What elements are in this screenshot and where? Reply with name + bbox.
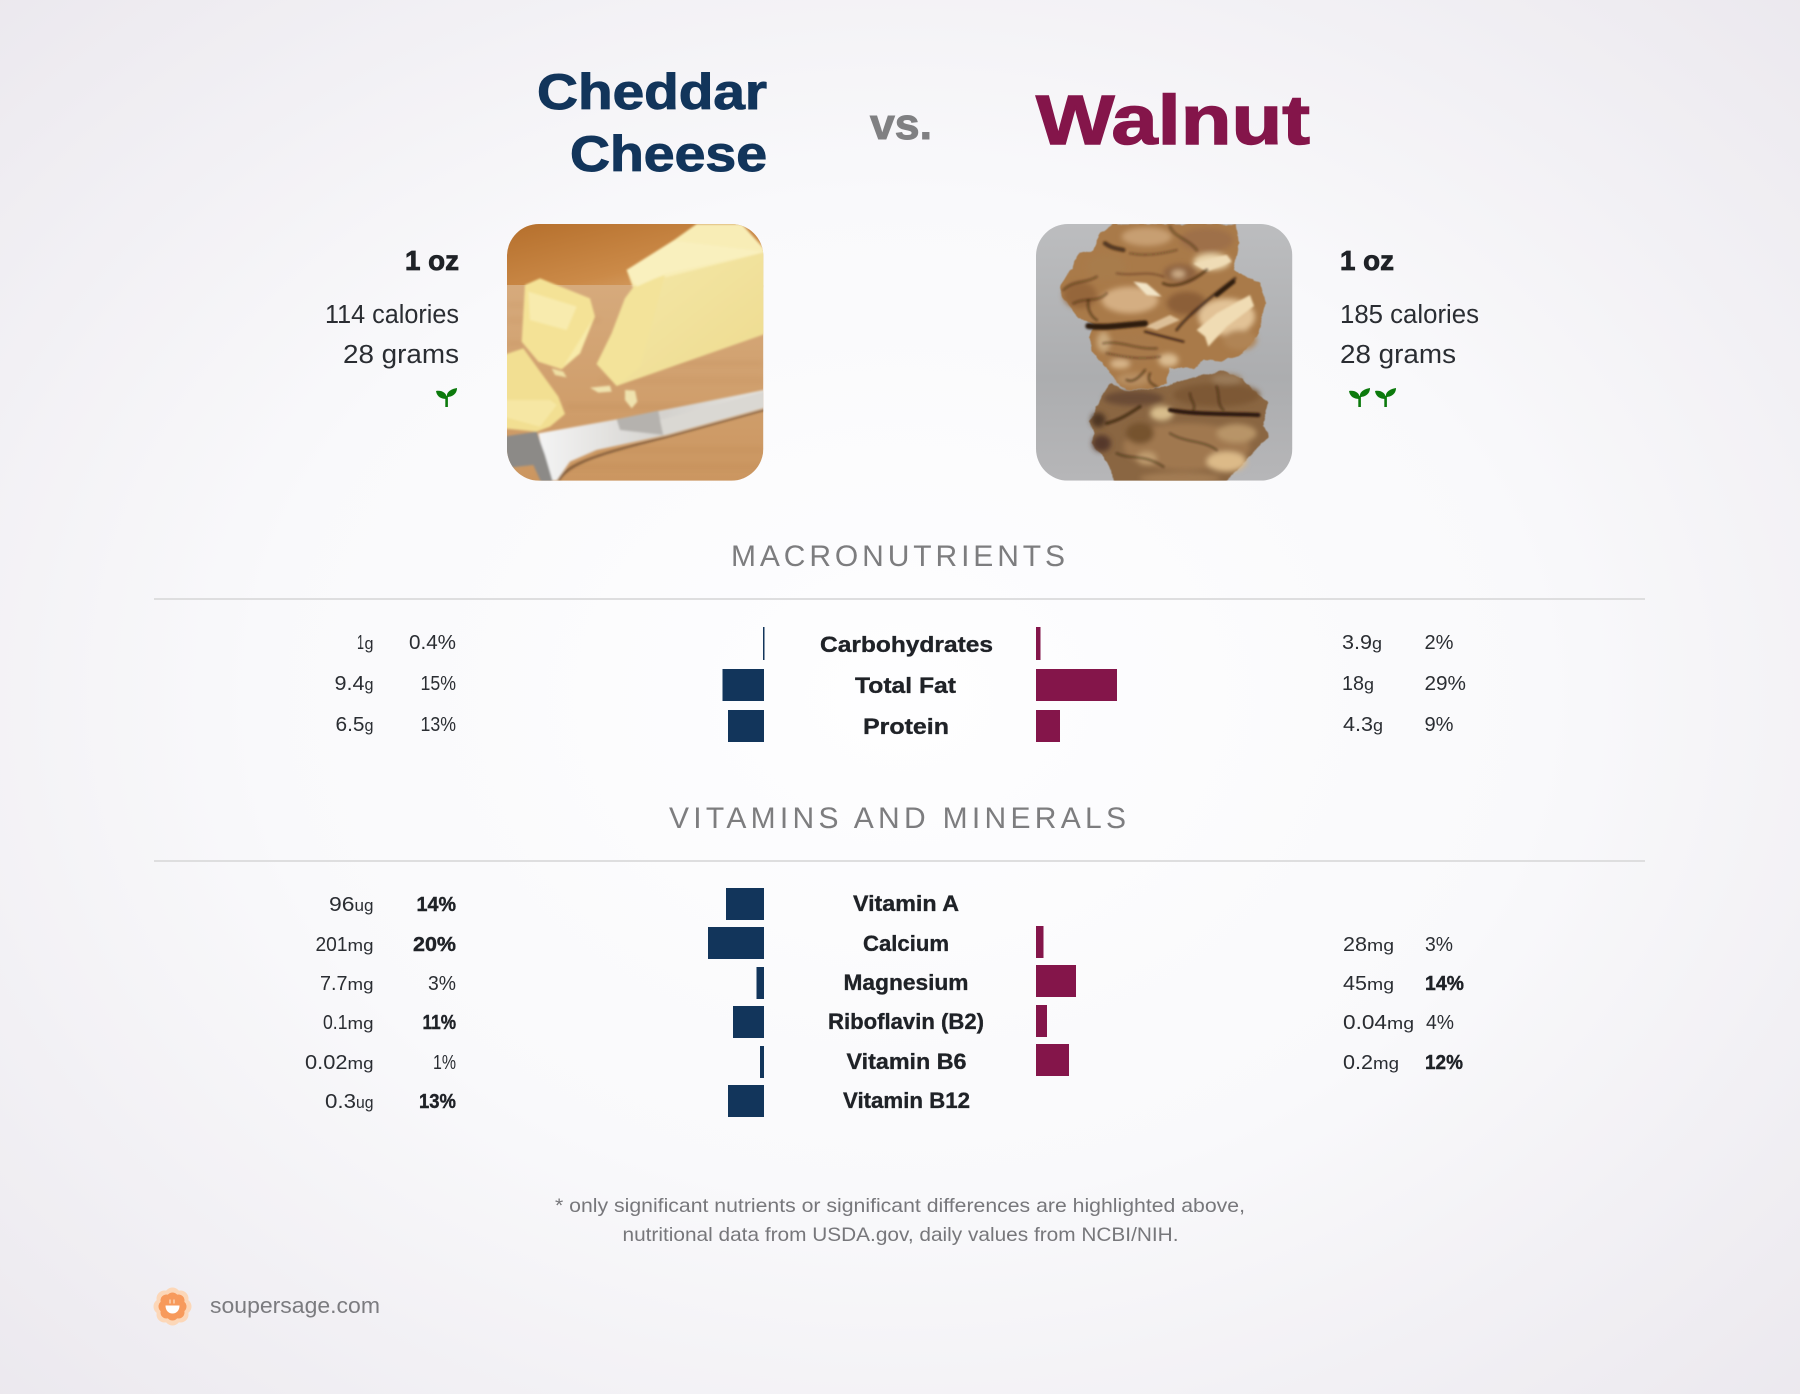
icon: sprout rating walnut	[1349, 388, 1396, 407]
footnote: nutritional data from USDA.gov, daily values from NCBI/NIH.	[622, 1224, 1178, 1246]
row: riboflavin: 0.1	[323, 1012, 348, 1034]
row: vitamin B12: ug	[356, 1094, 374, 1112]
row: calcium: 20%	[413, 934, 456, 956]
row: total fat: 29%	[1424, 673, 1466, 695]
serving info: walnut: 185 calories	[1340, 301, 1479, 329]
row: carbohydrates: 1	[357, 632, 364, 654]
row: riboflavin: mg	[348, 1015, 374, 1033]
big wedge	[627, 224, 767, 288]
row: carbohydrates: 2%	[1424, 632, 1454, 654]
row: magnesium: mg	[1367, 976, 1394, 994]
row: protein: g	[1373, 717, 1383, 735]
kernel	[1060, 224, 1266, 391]
heading: macronutrients: MACRONUTRIENTS	[731, 540, 1065, 573]
row: vitamin B12	[325, 1085, 970, 1117]
row: magnesium: 14%	[1425, 973, 1464, 995]
heading: vitamins and minerals: VITAMINS AND MINERALS	[669, 802, 1126, 835]
row: calcium: 201	[316, 934, 348, 956]
row: vitamin A	[329, 888, 959, 920]
knife	[538, 389, 767, 481]
row: vitamin B12: 0.3	[325, 1091, 356, 1113]
title: Cheddar Cheese	[537, 64, 767, 182]
row: vitamin A: 96	[329, 894, 354, 916]
serving info: walnut	[1340, 245, 1479, 369]
row: riboflavin: Riboflavin (B2)	[828, 1009, 984, 1034]
row: protein: 4.3	[1343, 714, 1373, 736]
panel: vitamins and minerals table	[305, 888, 1464, 1117]
row: riboflavin: mg	[1387, 1015, 1414, 1033]
row: calcium: mg	[348, 937, 374, 955]
row: vitamin B6: mg	[348, 1055, 374, 1073]
icon: sprout rating cheddar	[436, 388, 457, 407]
row: calcium: 28	[1343, 934, 1367, 956]
serving info: cheddar: 114 calories	[325, 301, 459, 329]
row: vitamin A: ug	[354, 897, 374, 915]
row: vitamin B6: mg	[1373, 1055, 1399, 1073]
row: vitamin B6: Vitamin B6	[846, 1049, 966, 1074]
row: total fat: g	[364, 676, 374, 694]
row: carbohydrates: g	[364, 635, 374, 653]
row: vitamin B6: 0.02	[305, 1052, 348, 1074]
row: calcium	[316, 926, 1453, 959]
title: Cheddar Cheese: Cheddar	[537, 64, 767, 120]
row: magnesium: mg	[348, 976, 374, 994]
row: vitamin B6: 1%	[433, 1052, 456, 1074]
photo: cheddar cheese	[503, 224, 767, 483]
row: riboflavin	[323, 1005, 1454, 1038]
row: protein	[336, 710, 1454, 742]
row: protein: 13%	[420, 714, 456, 736]
row: total fat: Total Fat	[855, 673, 957, 698]
row: protein: g	[364, 717, 374, 735]
row: calcium: mg	[1367, 937, 1394, 955]
row: carbohydrates: 0.4%	[409, 632, 456, 654]
panel: macronutrients table	[334, 627, 1466, 742]
row: magnesium: 45	[1343, 973, 1367, 995]
brand text: soupersage.com	[210, 1293, 380, 1318]
row: protein: Protein	[863, 714, 949, 739]
middle piece	[522, 278, 595, 369]
row: vitamin B6	[305, 1044, 1463, 1078]
row: vitamin B12: 13%	[419, 1091, 456, 1113]
row: vitamin B12: Vitamin B12	[843, 1088, 970, 1113]
row: magnesium: 7.7	[320, 973, 348, 995]
row: protein: 9%	[1424, 714, 1454, 736]
row: carbohydrates: Carbohydrates	[820, 632, 993, 657]
row: magnesium	[320, 965, 1464, 999]
serving info: walnut: 1 oz	[1340, 245, 1394, 276]
reflection	[1090, 371, 1268, 483]
title: Cheddar Cheese: Cheese	[570, 126, 767, 182]
row: calcium: Calcium	[863, 931, 949, 956]
row: total fat	[334, 669, 1466, 701]
crumbs	[552, 368, 567, 377]
footnote: * only significant nutrients or significant differences are highlighted above,	[555, 1195, 1245, 1217]
row: magnesium: Magnesium	[844, 970, 968, 995]
row: total fat: 9.4	[334, 673, 364, 695]
footnote	[555, 1195, 1245, 1246]
row: carbohydrates	[357, 627, 1454, 660]
photo: walnut	[1036, 224, 1292, 484]
title: Walnut: Walnut	[1036, 81, 1310, 159]
row: total fat: 18	[1342, 673, 1364, 695]
serving info: walnut: 28 grams	[1340, 341, 1456, 369]
title: vs.: vs.	[870, 100, 932, 149]
row: carbohydrates: g	[1372, 635, 1382, 653]
row: total fat: g	[1364, 676, 1374, 694]
row: protein: 6.5	[336, 714, 364, 736]
row: calcium: 3%	[1425, 934, 1453, 956]
row: vitamin B6: 12%	[1425, 1052, 1463, 1074]
lower left piece	[503, 348, 565, 432]
row: vitamin A: 14%	[416, 894, 456, 916]
icon: soupersage logo	[154, 1288, 192, 1326]
row: riboflavin: 4%	[1426, 1012, 1454, 1034]
serving info: cheddar: 28 grams	[343, 341, 459, 369]
row: vitamin A: Vitamin A	[853, 891, 959, 916]
row: vitamin B6: 0.2	[1343, 1052, 1373, 1074]
row: total fat: 15%	[420, 673, 456, 695]
row: magnesium: 3%	[428, 973, 456, 995]
row: riboflavin: 0.04	[1343, 1012, 1387, 1034]
serving info: cheddar: 1 oz	[405, 245, 459, 276]
serving info: cheddar	[325, 245, 459, 369]
row: carbohydrates: 3.9	[1342, 632, 1372, 654]
row: riboflavin: 11%	[422, 1012, 456, 1034]
